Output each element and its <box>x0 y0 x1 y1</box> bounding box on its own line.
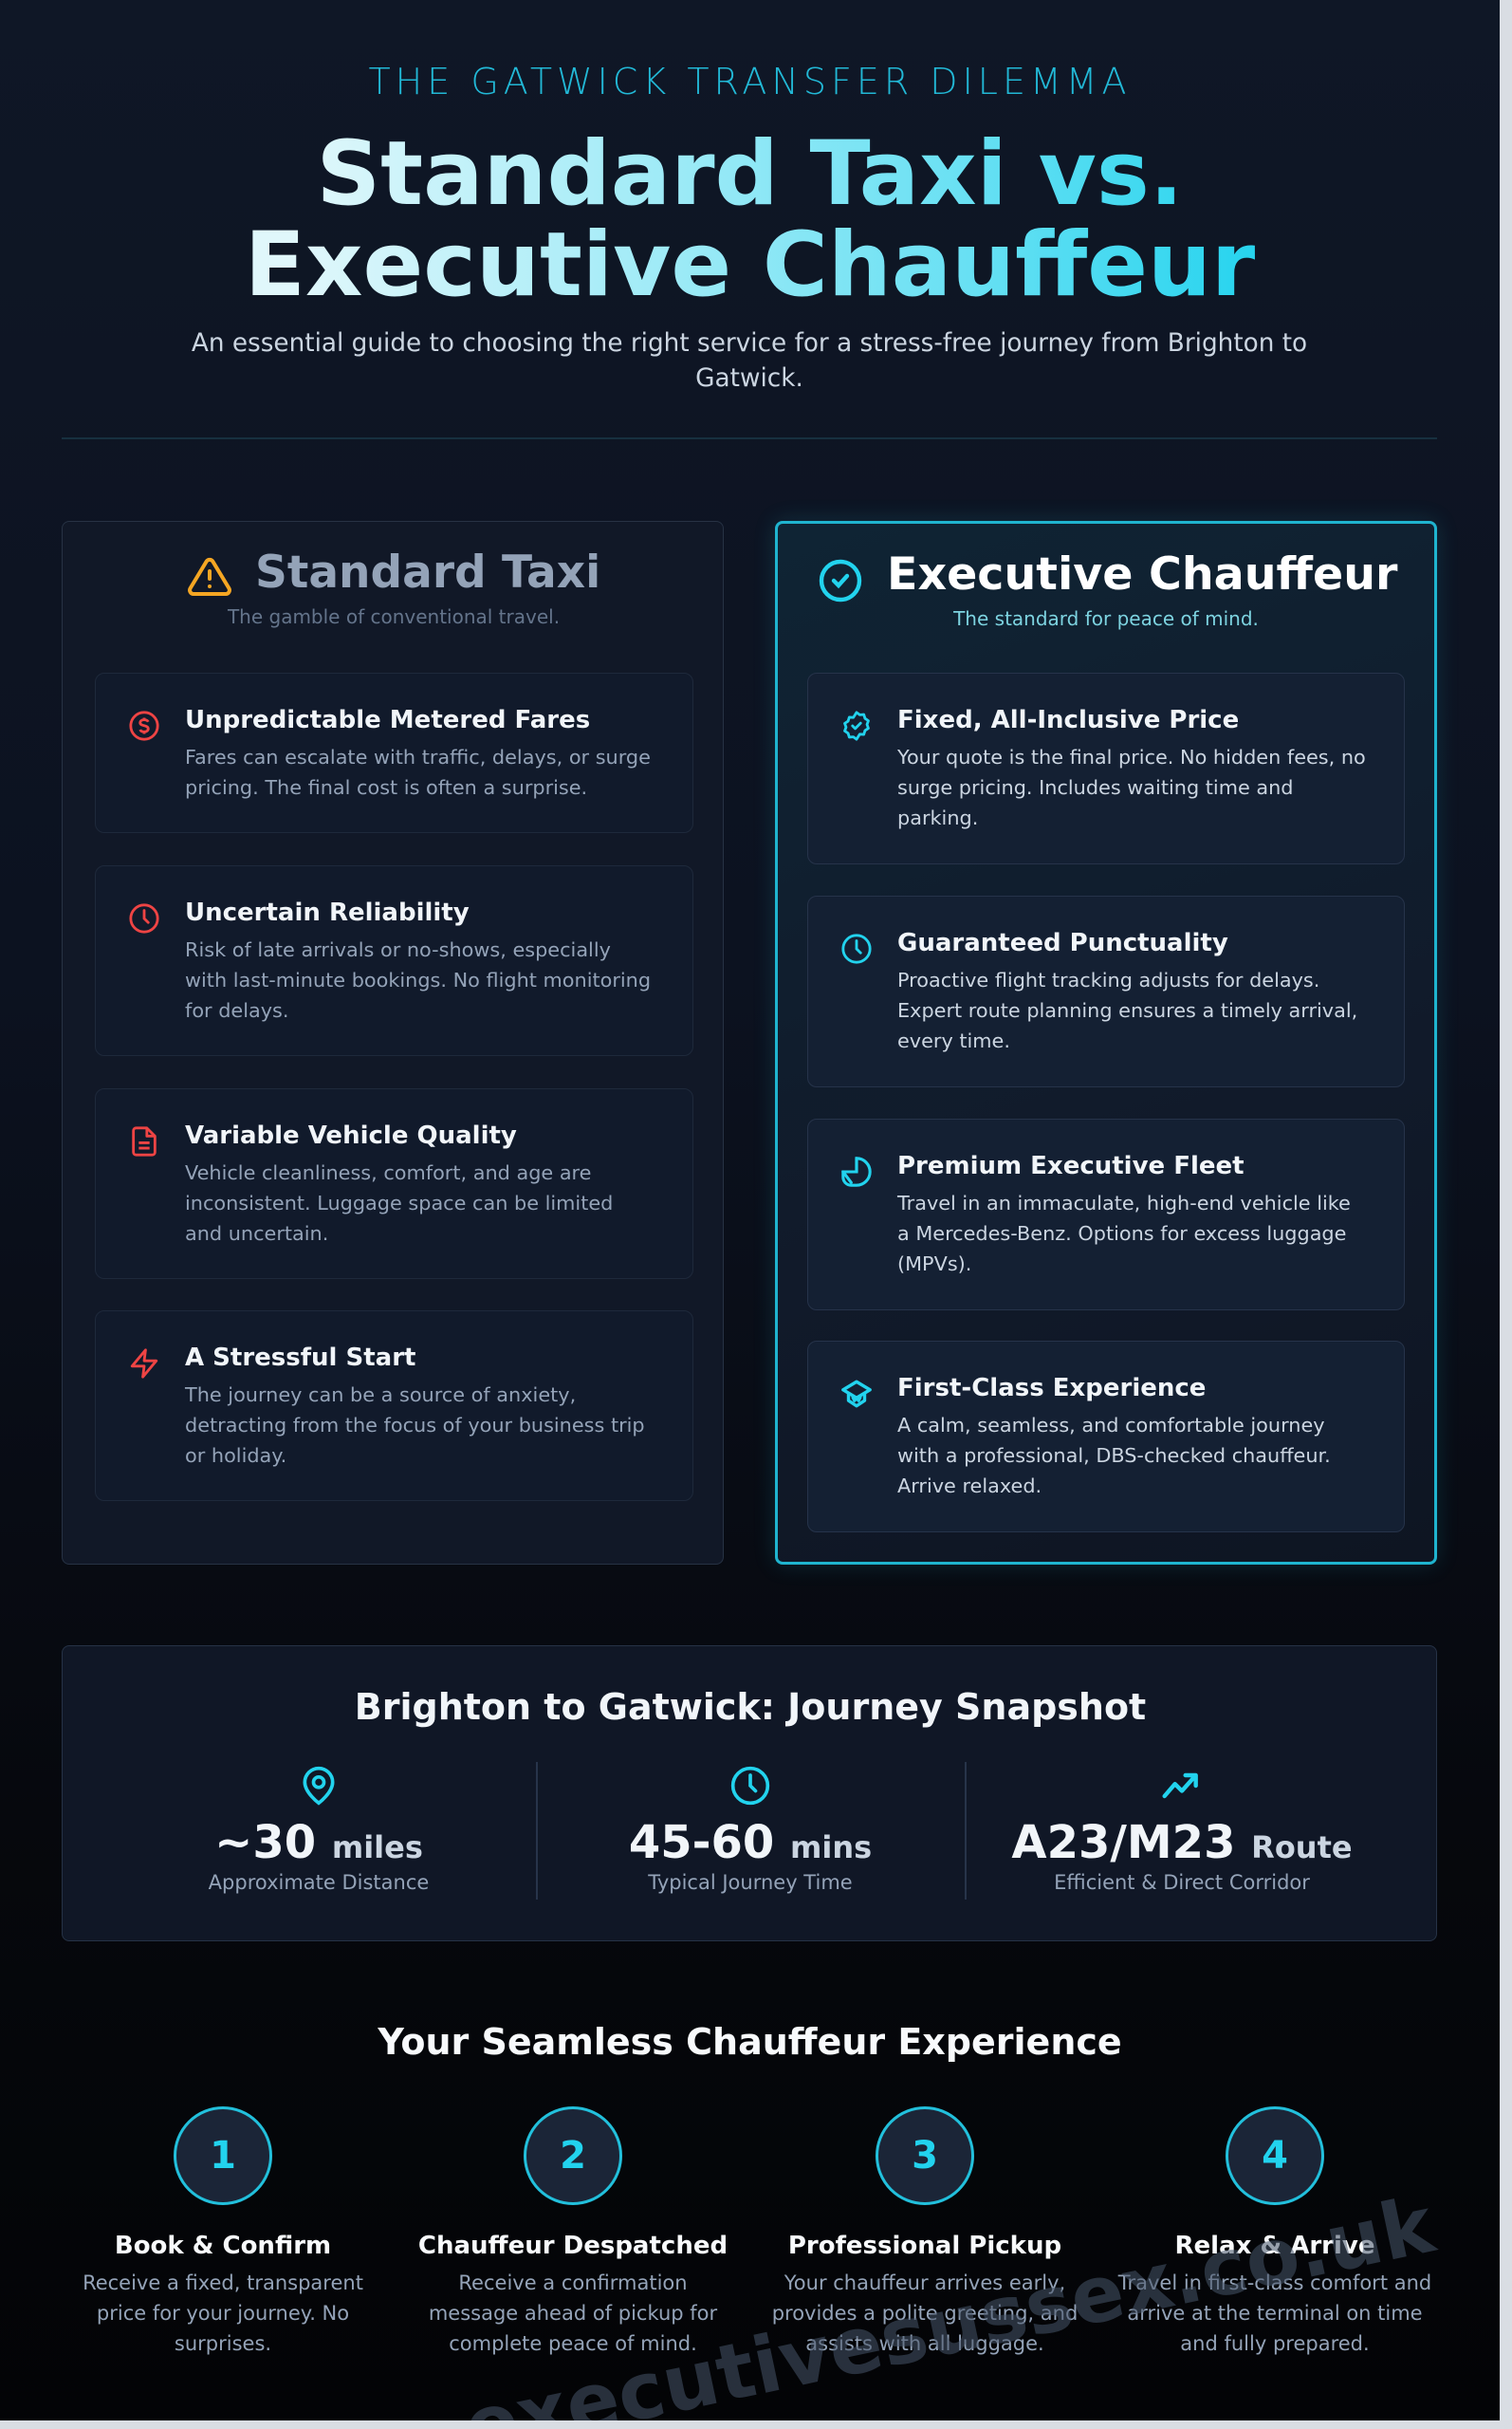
step 3: 3 <box>912 2134 938 2178</box>
card: uncertain reliability: Risk of late arrivals or no-shows, especially <box>185 938 611 961</box>
step 4: Relax & Arrive <box>1175 2232 1374 2260</box>
heading: standard taxi: The gamble of conventional travel. <box>228 605 560 628</box>
card: first class: A calm, seamless, and comfortable journey <box>897 1414 1325 1437</box>
title: Executive Chauffeur <box>245 213 1255 317</box>
card: fixed price <box>807 673 1405 864</box>
icon: document <box>132 1126 157 1157</box>
card: unpredictable fares: Fares can escalate with traffic, delays, or surge pricing. The final cost is often a surprise. <box>185 746 651 799</box>
stat: distance: ~30 miles <box>214 1816 423 1869</box>
card: uncertain reliability: Uncertain Reliability <box>185 899 470 927</box>
stat: time: Typical Journey Time <box>648 1871 853 1894</box>
card: vehicle quality: Vehicle cleanliness, comfort, and age are inconsistent. Luggage space can be limited <box>185 1161 613 1214</box>
stat: distance <box>209 1767 429 1894</box>
heading: executive chauffeur: Executive Chauffeur <box>887 548 1397 601</box>
card: uncertain reliability: with last-minute bookings. No flight monitoring for delays. <box>185 969 651 1022</box>
stat: time <box>629 1767 872 1894</box>
step 1: Book & Confirm <box>115 2232 331 2260</box>
card: vehicle quality: Variable Vehicle Quality <box>185 1122 517 1150</box>
card: uncertain reliability <box>95 865 693 1056</box>
heading: journey snapshot: Brighton to Gatwick: Journey Snapshot <box>355 1686 1146 1728</box>
stat: distance: Approximate Distance <box>209 1871 429 1894</box>
card: vehicle quality <box>95 1088 693 1279</box>
description: An essential guide to choosing the right service for a stress-free journey from Brighton to Gatwick. <box>192 329 1307 393</box>
heading: executive chauffeur: The standard for peace of mind. <box>953 607 1259 630</box>
step 1: 1 <box>210 2134 236 2178</box>
card: stressful start: The journey can be a source of anxiety, detracting from the focus of your business trip or holiday. <box>185 1383 645 1467</box>
heading: seamless experience: Your Seamless Chauffeur Experience <box>378 2021 1122 2063</box>
icon: badge check <box>843 711 870 741</box>
step 4: Travel in first-class comfort and arrive at the terminal on time and fully prepared. <box>1118 2271 1431 2355</box>
card: first class <box>807 1341 1405 1532</box>
icon: wheel <box>841 1157 872 1187</box>
title <box>0 129 1500 311</box>
card: unpredictable fares: Unpredictable Metered Fares <box>185 706 590 734</box>
card: stressful start <box>95 1310 693 1501</box>
heading: executive chauffeur <box>820 548 1398 630</box>
icon: clock <box>841 934 872 964</box>
card: fleet: Premium Executive Fleet <box>897 1152 1245 1180</box>
stat: time: 45-60 mins <box>629 1816 872 1869</box>
stat: route: A23/M23 Route <box>1011 1816 1353 1869</box>
step 2: 2 <box>560 2134 586 2178</box>
step 2 <box>418 2106 728 2355</box>
title: Standard Taxi vs. <box>316 122 1184 226</box>
step 3 <box>772 2106 1078 2355</box>
panel: journey snapshot <box>62 1645 1437 1941</box>
icon: warning <box>188 558 231 596</box>
icon: dollar <box>129 711 159 741</box>
step 1 <box>83 2106 363 2355</box>
panel: executive chauffeur <box>775 521 1437 1565</box>
icon: clock <box>129 903 159 934</box>
step 4: 4 <box>1262 2134 1288 2178</box>
eyebrow heading: THE GATWICK TRANSFER DILEMMA <box>368 61 1132 102</box>
card: fleet: a Mercedes-Benz. Options for excess luggage (MPVs). <box>897 1222 1346 1275</box>
card: fleet: Travel in an immaculate, high-end vehicle like <box>897 1192 1351 1214</box>
card: stressful start: A Stressful Start <box>185 1344 415 1372</box>
icon: lightning <box>131 1348 157 1379</box>
stat: route <box>1011 1772 1353 1894</box>
icon: graduation <box>841 1380 872 1408</box>
icon: trend arrow <box>1163 1772 1198 1799</box>
step 1: Receive a fixed, transparent price for your journey. No surprises. <box>83 2271 363 2355</box>
card: first class: with a professional, DBS-checked chauffeur. Arrive relaxed. <box>897 1444 1331 1497</box>
panel: standard taxi <box>62 521 724 1565</box>
card: fleet <box>807 1119 1405 1310</box>
step 4 <box>1117 2106 1431 2355</box>
card: first class: First-Class Experience <box>897 1374 1206 1402</box>
step 3: Professional Pickup <box>788 2232 1061 2260</box>
card: vehicle quality: and uncertain. <box>185 1222 328 1245</box>
heading: standard taxi <box>188 547 600 628</box>
step 3: Your chauffeur arrives early, provides a polite greeting, and assists with all luggage. <box>772 2271 1078 2355</box>
step 2: Chauffeur Despatched <box>418 2232 728 2260</box>
heading: standard taxi: Standard Taxi <box>255 547 600 599</box>
icon: clock <box>730 1767 770 1805</box>
icon: check circle <box>820 560 861 602</box>
card: fixed price: Fixed, All-Inclusive Price <box>897 706 1239 734</box>
step 2: Receive a confirmation message ahead of pickup for complete peace of mind. <box>429 2271 717 2355</box>
card: punctuality: Guaranteed Punctuality <box>897 929 1228 957</box>
card: fixed price: Your quote is the final price. No hidden fees, no surge pricing. Includes waiting time and parking. <box>897 746 1366 829</box>
icon: map pin <box>304 1767 334 1806</box>
card: punctuality <box>807 896 1405 1087</box>
card: unpredictable fares <box>95 673 693 833</box>
card: punctuality: Proactive flight tracking adjusts for delays. Expert route planning ensures a timely arrival, every time. <box>897 969 1357 1052</box>
stat: route: Efficient & Direct Corridor <box>1054 1871 1310 1894</box>
